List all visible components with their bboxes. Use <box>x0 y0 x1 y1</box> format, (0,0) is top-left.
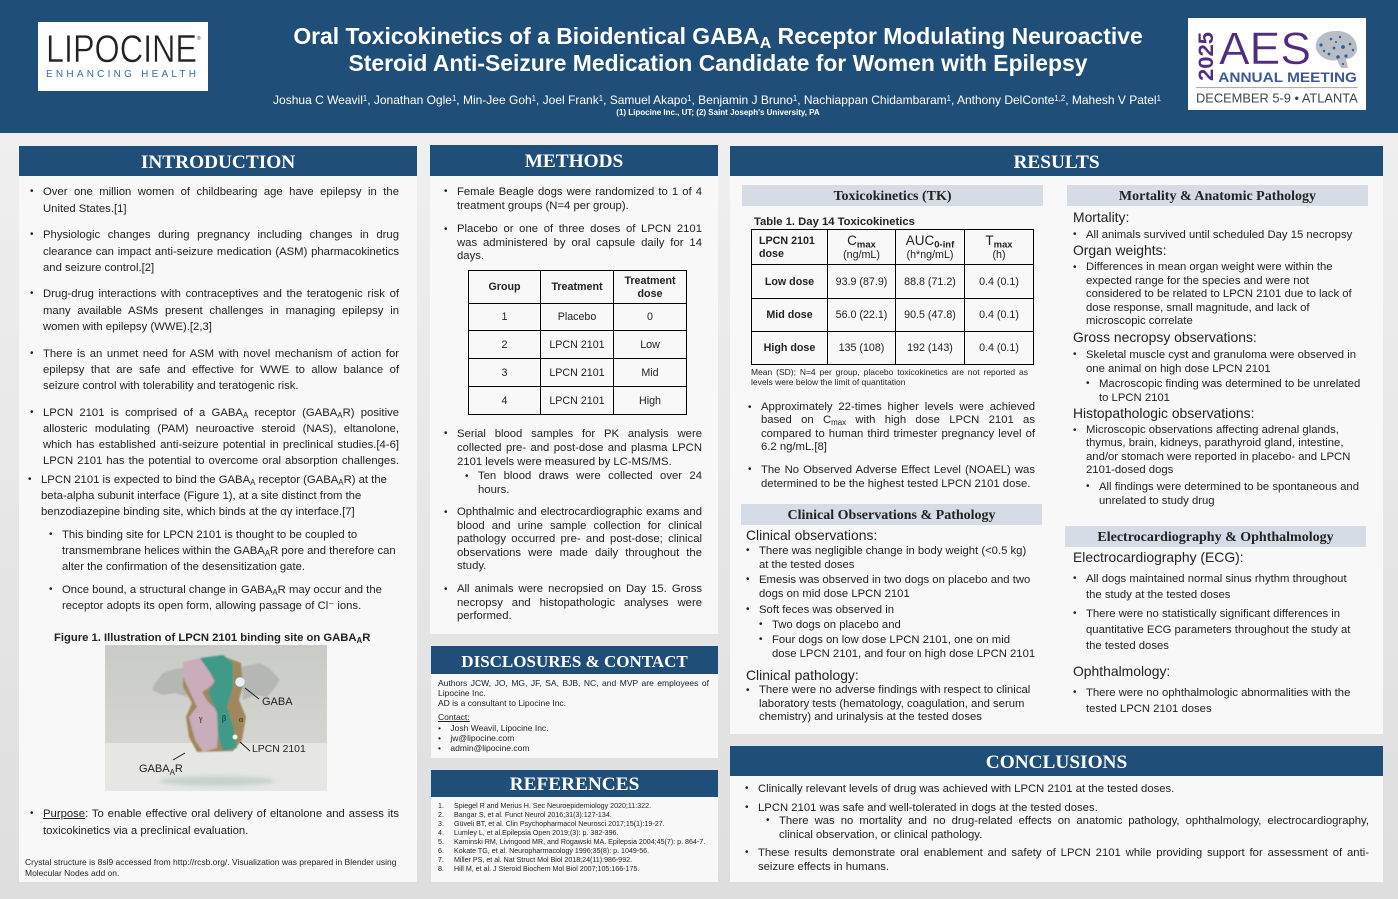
text: ophthalmic and ECG exams: pathology occurred pre- and post-dose; clinical <box>457 533 702 545</box>
text: necropsy: All animals were necropsied on Day 15. Gross <box>457 583 702 595</box>
text: drug interactions: Drug-drug interactions with contraceptives and the teratogenic risk of <box>43 288 399 300</box>
table: day 14 toxicokinetics: Low dose <box>765 276 814 288</box>
text: physiologic changes: and seizure control.[2] <box>43 262 154 274</box>
text: organ weights finding: microscopic correlate <box>1086 315 1193 327</box>
figure: GABA-A receptor structure: GABA <box>262 696 293 708</box>
table: day 14 toxicokinetics: LPCN 2101 <box>759 234 815 246</box>
title: Steroid Anti-Seizure Medication Candidate for Women with Epilepsy <box>349 50 1087 76</box>
text: blood sampling <box>457 427 702 469</box>
subheading: clinical observations and pathology: Clinical Observations & Pathology <box>787 508 996 523</box>
figure: GABA-A receptor structure: β <box>222 714 226 723</box>
heading: results <box>730 146 1383 176</box>
text: exposure finding: compared to human third trimester pregnancy level of <box>761 428 1035 440</box>
table note <box>751 367 1028 387</box>
table: treatment groups: dose <box>638 288 662 300</box>
reference list: Kokate TG, et al. Neuropharmacology 1996;35(8): p. 1049-56. <box>454 847 649 855</box>
reference list: Kaminski RM, Livingood MR, and Rogawski MA. Epilepsia 2004;45(7): p. 864-7. <box>454 838 705 846</box>
text: blood sampling: 2101 levels were measured by LC-MS/MS. <box>457 456 672 468</box>
text: ophthalmic and ECG exams <box>457 506 702 574</box>
reference list: 4. <box>438 829 444 837</box>
text: ophthalmic and ECG exams: blood and urine sample collection for clinical <box>457 520 702 532</box>
text: LPCN 2101 description: LPCN 2101 has the potential to overcome oral absorption challenges. <box>43 455 399 467</box>
text: soft feces: Soft feces was observed in <box>759 604 894 616</box>
affiliations: (1) Lipocine Inc., UT; (2) Saint Joseph's University, PA <box>616 108 820 117</box>
text: unmet need: seizure control with tolerability and teratogenic risk. <box>43 380 299 392</box>
label: organ weights: Organ weights: <box>1073 242 1166 258</box>
text: emesis <box>759 573 1044 601</box>
heading: references <box>431 770 718 797</box>
table: treatment groups: High <box>639 394 661 406</box>
text: conclusion 2 detail: clinical observation, or clinical pathology. <box>779 829 982 841</box>
table: treatment groups: Treatment <box>551 281 603 293</box>
text: unmet need: There is an unmet need for ASM with novel mechanism of action for <box>43 348 399 360</box>
table: day 14 toxicokinetics: 93.9 (87.9) <box>836 276 887 288</box>
text: purpose <box>43 806 399 839</box>
text: blood draws <box>478 470 702 497</box>
text: binding site coupling: transmembrane helices within the GABAAR pore and therefore can <box>62 545 396 558</box>
authors: Joshua C Weavil1, Jonathan Ogle1, Min-Jee Goh1, Joel Frank1, Samuel Akapo1, Benjamin J Bruno1, Nachiappan Chidambaram1, Anthony DelConte1,2, Mahesh V Patel1 <box>273 93 1161 107</box>
text: exposure finding <box>761 401 1035 455</box>
text: ECG parameters: the tested doses <box>1086 640 1169 652</box>
text: exposure finding: 6.2 ng/mL.[8] <box>761 441 827 453</box>
text: soft feces dosed <box>772 633 1042 661</box>
footnote: crystal structure: Molecular Nodes add on. <box>25 868 119 878</box>
text: gross necropsy finding: one animal on high dose LPCN 2101 <box>1086 363 1271 375</box>
text: body weight <box>759 544 1044 572</box>
text: gross necropsy finding <box>1086 348 1371 376</box>
figure: GABA-A receptor structure: A <box>170 768 176 777</box>
text: necropsy <box>457 583 702 624</box>
text: clinical pathology findings: chemistry) and urinalysis at the tested doses <box>759 711 982 723</box>
text: randomization: treatment groups (N=4 per group). <box>457 200 629 212</box>
subheading: clinical observations and pathology <box>741 504 1042 525</box>
text: dosing <box>457 223 702 264</box>
text: structural change: Once bound, a structural change in GABAAR may occur and the <box>62 584 382 597</box>
subheading: toxicokinetics: Toxicokinetics (TK) <box>833 189 952 204</box>
text: disclosures: Authors JCW, JO, MG, JF, SA, BJB, NC, and MVP are employees of <box>438 678 709 688</box>
text: organ weights finding <box>1086 261 1371 328</box>
text: purpose: toxicokinetics via a preclinical evaluation. <box>43 824 248 836</box>
text: sinus rhythm <box>1086 571 1371 603</box>
title: Oral Toxicokinetics of a Bioidentical GABAA Receptor Modulating Neuroactive <box>293 23 1143 52</box>
text: epilepsy prevalence <box>43 184 399 217</box>
text: dosing: days. <box>457 250 484 262</box>
panel: methods <box>430 145 718 634</box>
text: conclusion 2: LPCN 2101 was safe and well-tolerated in dogs at the tested doses. <box>758 802 1098 814</box>
panel: references <box>431 770 718 882</box>
text: conclusion 2 detail: There was no mortality and no drug-related effects on anatomic pathology, ophthalmology, electrocardiography, <box>779 815 1369 827</box>
table: treatment groups: 0 <box>647 311 653 323</box>
table caption: Table 1. Day 14 Toxicokinetics <box>754 216 915 228</box>
text: exposure finding: based on Cmax with high dose LPCN 2101 as <box>761 414 1035 427</box>
figure caption: Figure 1. Illustration of LPCN 2101 binding site on GABAAR <box>54 632 370 645</box>
reference list: 3. <box>438 820 444 828</box>
heading: disclosures <box>431 646 718 674</box>
table: treatment groups: LPCN 2101 <box>549 366 605 378</box>
table: treatment groups: LPCN 2101 <box>549 394 605 406</box>
text: spontaneous findings: unrelated to study drug <box>1099 495 1215 507</box>
reference list: 5. <box>438 838 444 846</box>
text: contact <box>438 712 549 753</box>
text: binding site coupling <box>62 527 402 575</box>
heading: methods <box>430 145 718 176</box>
text: blood sampling: collected pre- and post-dose and plasma LPCN <box>457 442 702 454</box>
reference list: Hill M, et al. J Steroid Biochem Mol Biol 2007;105:166-175. <box>454 865 639 873</box>
table: day 14 toxicokinetics: 135 (108) <box>839 342 884 354</box>
label: gross necropsy: Gross necropsy observations: <box>1073 328 1257 344</box>
table note: levels were below the limit of quantitation <box>751 377 906 387</box>
logo: Lipocine: ENHANCING HEALTH <box>46 69 196 80</box>
figure: GABA-A receptor structure: R <box>175 763 183 775</box>
text: ophthalmology finding <box>1086 685 1371 717</box>
text: organ weights finding: Differences in mean organ weight were within the <box>1086 261 1333 273</box>
table: treatment groups: Low <box>640 338 660 350</box>
text: LPCN 2101 description <box>43 405 399 469</box>
text: conclusion 1: Clinically relevant levels of drug was achieved with LPCN 2101 at the tested doses. <box>758 783 1174 795</box>
text: organ weights finding: dose response, small magnitude, and lack of <box>1086 302 1310 314</box>
text: NOAEL: The No Observed Adverse Effect Level (NOAEL) was <box>761 464 1035 476</box>
heading: references: REFERENCES <box>510 774 639 795</box>
text: soft feces placebo: Two dogs on placebo and <box>772 619 901 631</box>
table: treatment groups: LPCN 2101 <box>549 338 605 350</box>
text: disclosures: Lipocine Inc. <box>438 688 486 698</box>
label: mortality: Mortality: <box>1073 208 1129 224</box>
text: emesis: Emesis was observed in two dogs on placebo and two <box>759 574 1030 586</box>
logo: Lipocine <box>38 22 208 91</box>
reference list: 2. <box>438 811 444 819</box>
text: unmet need <box>43 346 399 395</box>
text: clinical pathology findings: laboratory tests (hematology, coagulation, and serum <box>759 698 1024 710</box>
text: contact: Contact: <box>438 712 470 722</box>
text: conclusion 3 <box>758 846 1369 874</box>
text: disclosures <box>438 678 709 708</box>
text: LPCN 2101 description: which has established anti-seizure potential in preclinical studies.[4-6] <box>43 439 399 451</box>
text: disclosures: AD is a consultant to Lipocine Inc. <box>438 698 566 708</box>
text: dosing: was administered by oral capsule daily for 14 <box>457 237 702 249</box>
text: ophthalmology finding: There were no ophthalmologic abnormalities with the <box>1086 687 1350 699</box>
subheading: mortality and anatomic pathology: Mortality & Anatomic Pathology <box>1119 189 1316 204</box>
figure: GABA-A receptor structure: γ <box>198 714 203 723</box>
text: macroscopic finding: to LPCN 2101 <box>1099 392 1170 404</box>
reference list: 7. <box>438 856 444 864</box>
text: structural change <box>62 582 402 614</box>
subheading: toxicokinetics <box>742 185 1043 206</box>
text: conclusion 3: These results demonstrate oral enablement and safety of LPCN 2101 while providing support for assessment of anti- <box>758 847 1369 859</box>
table: day 14 toxicokinetics: (h*ng/mL) <box>907 248 953 260</box>
panel: conclusions <box>730 746 1383 882</box>
text: blood sampling: Serial blood samples for PK analysis were <box>457 428 702 440</box>
text: macroscopic finding <box>1099 377 1369 405</box>
table: day 14 toxicokinetics <box>751 229 1034 365</box>
subheading: electrocardiography and ophthalmology: Electrocardiography & Ophthalmology <box>1097 530 1334 545</box>
text: structural change: receptor adopts its open form, allowing passage of Cl⁻ ions. <box>62 600 361 612</box>
table: treatment groups: 4 <box>502 394 507 406</box>
reference list: 1. <box>438 802 444 810</box>
table: day 14 toxicokinetics: 88.8 (71.2) <box>904 276 956 288</box>
label: ophthalmology: Ophthalmology: <box>1073 662 1170 678</box>
text: exposure finding: Approximately 22-times higher levels were achieved <box>761 401 1035 413</box>
label: clinical observations: Clinical observations: <box>746 526 877 542</box>
text: body weight: There was negligible change in body weight (<0.5 kg) <box>759 545 1026 557</box>
reference list <box>438 802 705 873</box>
panel: disclosures and contact <box>431 646 718 758</box>
table: treatment groups: 2 <box>502 338 507 350</box>
table: day 14 toxicokinetics: dose <box>759 248 784 260</box>
figure: GABA-A receptor structure: LPCN 2101 <box>252 744 306 755</box>
heading: methods: METHODS <box>525 151 623 172</box>
heading: introduction <box>19 146 417 176</box>
text: spontaneous findings <box>1099 480 1369 508</box>
text: histopathologic finding: thymus, brain, kidneys, parathyroid gland, intestine, <box>1086 437 1343 449</box>
table: day 14 toxicokinetics: 0.4 (0.1) <box>979 309 1019 321</box>
text: randomization <box>457 185 702 214</box>
text: NOAEL: determined to be the highest tested LPCN 2101 dose. <box>761 478 1030 490</box>
table: treatment groups: Mid <box>641 366 659 378</box>
table: day 14 toxicokinetics: (h) <box>992 248 1006 260</box>
table: day 14 toxicokinetics: 90.5 (47.8) <box>904 309 956 321</box>
reference list: Güveli BT, et al. Clin Psychopharmacol Neurosci 2017;15(1):19-27. <box>454 820 665 828</box>
text: randomization: Female Beagle dogs were randomized to 1 of 4 <box>457 186 702 198</box>
text: epilepsy prevalence: United States.[1] <box>43 202 127 214</box>
table: day 14 toxicokinetics: 0.4 (0.1) <box>979 276 1019 288</box>
heading: introduction: INTRODUCTION <box>141 152 295 173</box>
text: clinical pathology findings <box>759 684 1044 724</box>
reference list: Bangar S, et al. Funct Neurol 2016;31(3):127-134. <box>454 811 612 819</box>
table: day 14 toxicokinetics: 192 (143) <box>907 342 953 354</box>
text: mortality finding: All animals survived until scheduled Day 15 necropsy <box>1086 229 1352 241</box>
table: day 14 toxicokinetics: 0.4 (0.1) <box>979 342 1019 354</box>
table: day 14 toxicokinetics: (ng/mL) <box>843 248 880 260</box>
text: gross necropsy finding: Skeletal muscle cyst and granuloma were observed in <box>1086 349 1356 361</box>
text: ECG parameters: quantitative ECG parameters throughout the study at <box>1086 624 1350 636</box>
table: day 14 toxicokinetics: AUC0-inf <box>906 232 954 250</box>
table: day 14 toxicokinetics: 56.0 (22.1) <box>836 309 887 321</box>
table: day 14 toxicokinetics: High dose <box>764 342 815 354</box>
text: physiologic changes: clearance can impact anti-seizure medication (ASM) pharmacokinetics <box>43 246 399 258</box>
text: contact: • jw@lipocine.com <box>438 733 514 743</box>
table: treatment groups: Placebo <box>558 311 596 323</box>
table: treatment groups: Group <box>488 281 521 293</box>
text: histopathologic finding: Microscopic observations affecting adrenal glands, <box>1086 424 1339 436</box>
logo: AES 2025 annual meeting <box>1188 18 1366 110</box>
text: binding expectation: LPCN 2101 is expected to bind the GABAA receptor (GABAAR) at the <box>41 474 387 487</box>
table: treatment groups: Treatment <box>624 274 676 286</box>
text: drug interactions: women with epilepsy (WWE).[2,3] <box>43 321 212 333</box>
figure: GABA-A receptor structure: GABA <box>139 763 170 775</box>
text: ophthalmic and ECG exams: observations were made daily throughout the <box>457 547 702 559</box>
text: LPCN 2101 description: LPCN 2101 is comprised of a GABAA receptor (GABAAR) positive <box>43 407 399 420</box>
table: day 14 toxicokinetics: Tmax <box>985 232 1013 250</box>
text: contact: • admin@lipocine.com <box>438 743 529 753</box>
text: ophthalmology finding: tested LPCN 2101 doses <box>1086 703 1212 715</box>
text: purpose: Purpose: To enable effective oral delivery of eltanolone and assess its <box>43 808 399 820</box>
table note: Mean (SD); N=4 per group, placebo toxicokinetics are not reported as <box>751 367 1028 377</box>
text: blood draws: Ten blood draws were collected over 24 <box>478 470 702 482</box>
table: treatment groups <box>468 270 687 415</box>
table: treatment groups: 3 <box>502 366 507 378</box>
text: necropsy: performed. <box>457 610 512 622</box>
label: histopathologic: Histopathologic observations: <box>1073 404 1254 420</box>
logo: AES 2025 annual meeting: DECEMBER 5-9 • ATLANTA <box>1196 91 1358 106</box>
text: ECG parameters: There were no statistically significant differences in <box>1086 608 1340 620</box>
text: soft feces dosed: Four dogs on low dose LPCN 2101, one on mid <box>772 634 1010 646</box>
heading: conclusions: CONCLUSIONS <box>986 752 1127 773</box>
text: drug interactions: many available ASMs present challenges in managing epilepsy in <box>43 304 399 316</box>
text: histopathologic finding: 2101-dosed dogs <box>1086 464 1173 476</box>
text: unmet need: epilepsy that are safe and effective for WWE to allow balance of <box>43 364 399 376</box>
text: sinus rhythm: All dogs maintained normal sinus rhythm throughout <box>1086 573 1347 585</box>
subheading: mortality and anatomic pathology <box>1067 185 1368 206</box>
text: drug interactions <box>43 286 399 336</box>
text: blood draws: hours. <box>478 484 509 496</box>
text: physiologic changes <box>43 227 399 276</box>
text: epilepsy prevalence: Over one million women of childbearing age have epilepsy in the <box>43 186 399 198</box>
reference list: Miller PS, et al. Nat Struct Mol Biol 2018;24(11):986-992. <box>454 856 632 864</box>
text: binding expectation: beta-alpha subunit interface (Figure 1), at a site distinct from the <box>41 490 361 502</box>
text: ophthalmic and ECG exams: study. <box>457 560 486 572</box>
table: treatment groups: 1 <box>502 311 507 323</box>
text: body weight: at the tested doses <box>759 559 854 571</box>
figure: GABA-A receptor structure <box>105 645 327 791</box>
logo: AES 2025 annual meeting: ANNUAL MEETING <box>1218 69 1357 85</box>
text: binding expectation: benzodiazepine binding site, which binds at the αγ interface.[7] <box>41 506 355 518</box>
text: conclusion 3: seizure effects in humans. <box>758 861 889 873</box>
title <box>293 23 1143 76</box>
text: binding site coupling: alter the confirmation of the desensitization gate. <box>62 561 305 573</box>
text: histopathologic finding <box>1086 424 1371 478</box>
logo: Lipocine: ® <box>197 35 201 42</box>
text: ophthalmic and ECG exams: Ophthalmic and electrocardiographic exams and <box>457 506 702 518</box>
header banner <box>0 0 1398 133</box>
text: conclusion 2 detail <box>779 814 1369 842</box>
figure: GABA-A receptor structure: α <box>239 715 244 724</box>
text: macroscopic finding: Macroscopic finding was determined to be unrelated <box>1099 378 1360 390</box>
text: NOAEL <box>761 463 1035 491</box>
text: physiologic changes: Physiologic changes during pregnancy including changes in drug <box>43 229 399 241</box>
text: LPCN 2101 description: allosteric modulating (PAM) neuroactive steroid (NAS), eltanolone, <box>43 423 399 435</box>
label: electrocardiography: Electrocardiography (ECG): <box>1073 548 1244 564</box>
table: day 14 toxicokinetics: Cmax <box>847 232 876 250</box>
text: binding expectation <box>41 472 391 520</box>
label: clinical pathology: Clinical pathology: <box>746 666 859 682</box>
heading: disclosures: DISCLOSURES & CONTACT <box>461 652 688 671</box>
footnote: crystal structure: Crystal structure is 8sl9 accessed from http://rcsb.org/. Visualization was prepared in Blender using <box>25 857 396 867</box>
reference list: Lumley L, et al.Epilepsia Open 2019;(3): p. 382-396. <box>454 829 618 837</box>
reference list: Spiegel R and Merius H. Sec Neuroepidemiology 2020;11:322. <box>454 802 651 810</box>
text: organ weights finding: considered to be related to LPCN 2101 due to lack of <box>1086 288 1352 300</box>
footnote: crystal structure <box>25 857 396 878</box>
text: histopathologic finding: and/or stomach were reported in placebo- and LPCN <box>1086 451 1350 463</box>
text: contact: • Josh Weavil, Lipocine Inc. <box>438 723 549 733</box>
text: clinical pathology findings: There were no adverse findings with respect to clinical <box>759 684 1030 696</box>
text: soft feces dosed: dose LPCN 2101, and four on high dose LPCN 2101 <box>772 648 1035 660</box>
text: ECG parameters <box>1086 606 1371 654</box>
text: dosing: Placebo or one of three doses of LPCN 2101 <box>457 223 702 235</box>
text: necropsy: necropsy and histopathologic analyses were <box>457 597 702 609</box>
heading: results: RESULTS <box>1013 152 1100 173</box>
text: binding site coupling: This binding site for LPCN 2101 is thought to be coupled to <box>62 529 357 541</box>
logo: AES 2025 annual meeting: AES <box>1219 23 1311 74</box>
panel: results <box>730 146 1383 734</box>
text: organ weights finding: expected range for the species and were not <box>1086 274 1309 286</box>
panel: introduction <box>19 146 417 882</box>
table: day 14 toxicokinetics: Mid dose <box>766 309 813 321</box>
text: sinus rhythm: the study at the tested doses <box>1086 589 1230 601</box>
text: spontaneous findings: All findings were determined to be spontaneous and <box>1099 481 1359 493</box>
logo: AES 2025 annual meeting: 2025 <box>1195 32 1218 81</box>
subheading: electrocardiography and ophthalmology <box>1065 526 1366 547</box>
reference list: 8. <box>438 865 444 873</box>
heading: conclusions <box>730 746 1383 776</box>
reference list: 6. <box>438 847 444 855</box>
text: emesis: dogs on mid dose LPCN 2101 <box>759 588 910 600</box>
